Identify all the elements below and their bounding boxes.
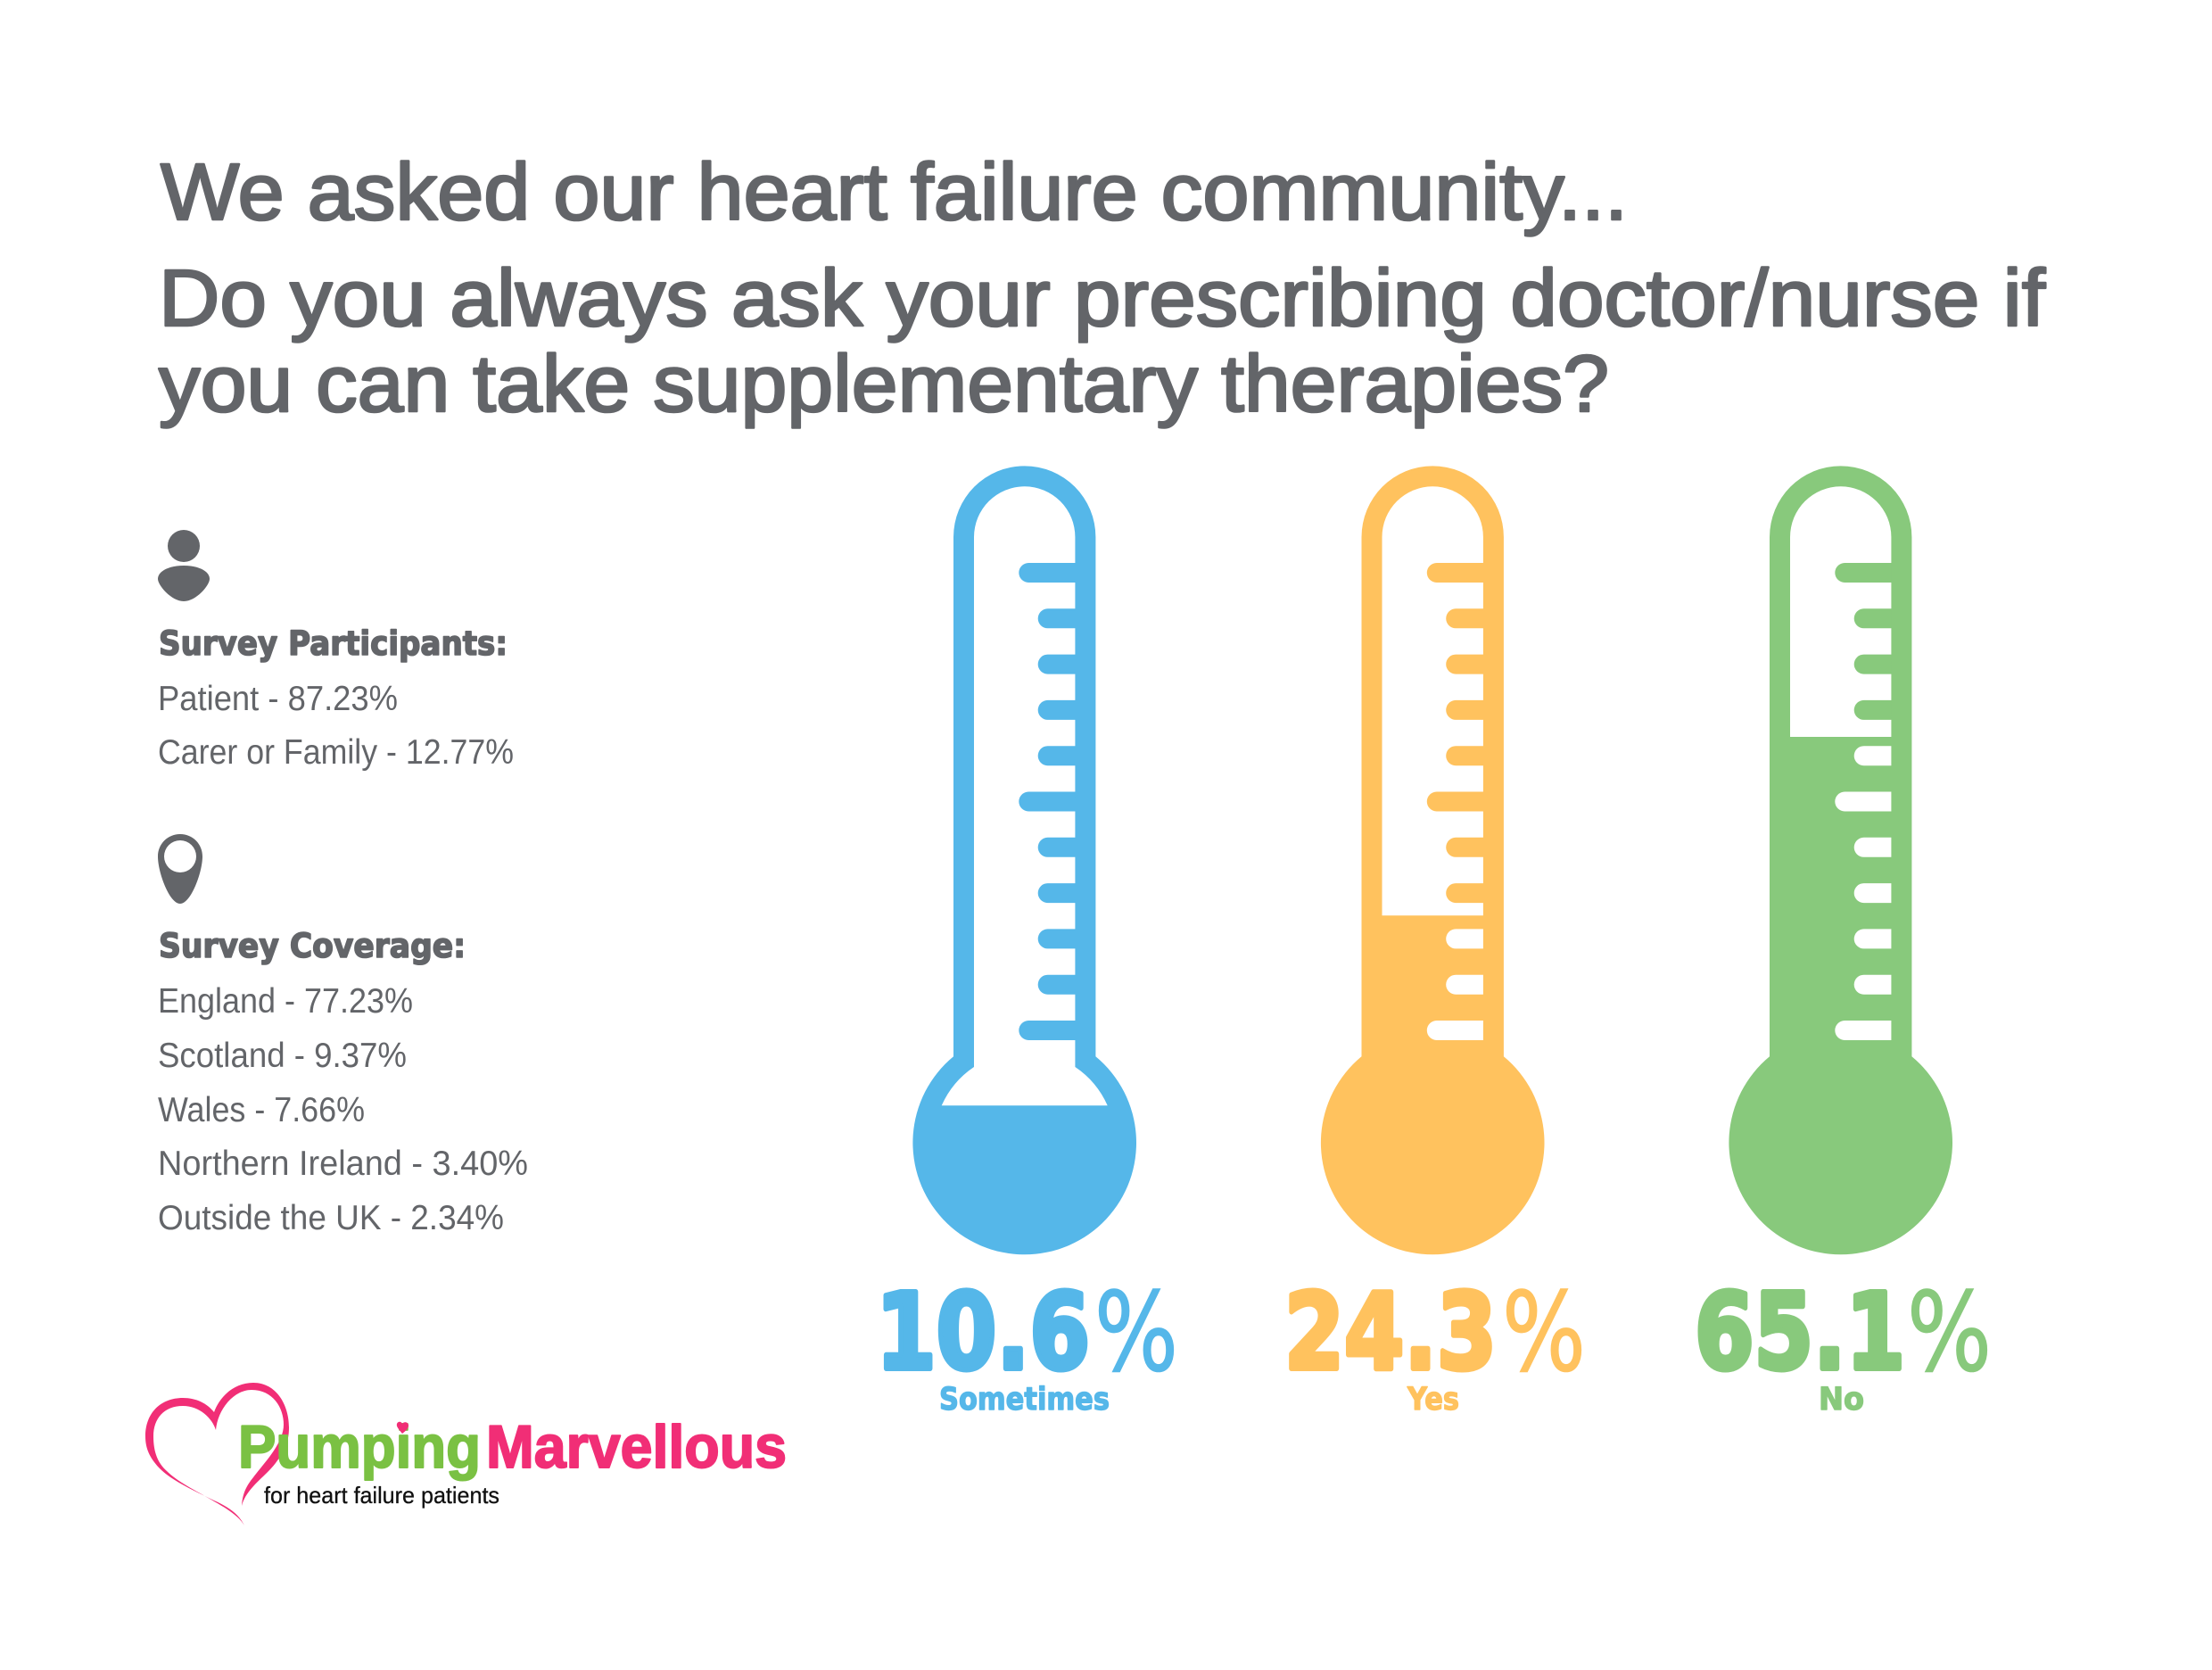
panel: survey participants (158, 530, 514, 772)
value: 65.1 (1695, 1270, 1905, 1393)
title line: intro: We asked our heart failure community... (161, 148, 1628, 237)
panel: survey coverage (158, 834, 528, 1237)
text: Scotland: Scotland - 9.37% (158, 1037, 407, 1075)
percent sign: % (1907, 1269, 1992, 1396)
scale ticks below level (1835, 746, 1891, 1040)
text: Northern Ireland: Northern Ireland - 3.40% (158, 1145, 528, 1183)
value: 10.6 (876, 1270, 1090, 1393)
title line: question part 1: Do you always ask your prescribing doctor/nurse if (159, 254, 2046, 343)
chart: thermometer Sometimes 10.6% (912, 466, 1136, 1254)
text: England: England - 77.23% (158, 982, 413, 1021)
text: Wales: Wales - 7.66% (158, 1091, 365, 1129)
value: 24.3 (1284, 1270, 1497, 1393)
scale ticks above level (1835, 563, 1892, 720)
icon: heart outline (145, 1383, 289, 1525)
scale ticks above level (1427, 563, 1483, 903)
label: Sometimes (939, 1382, 1110, 1418)
title line: question part 2: you can take supplementary therapies? (159, 340, 1609, 429)
empty cavity (1790, 486, 1891, 737)
stat: Sometimes 10.6% (876, 1269, 1178, 1418)
empty cavity (1382, 486, 1483, 915)
wordmark: Pumping: Pumping (238, 1413, 481, 1481)
icon: location pin (158, 834, 202, 904)
label: Yes (1407, 1382, 1459, 1418)
logo: Pumping Marvellous (145, 1383, 787, 1525)
wordmark: Marvellous: Marvellous (486, 1413, 787, 1481)
label: No (1819, 1382, 1864, 1418)
percent sign: % (1502, 1269, 1586, 1396)
percent sign: % (1094, 1269, 1178, 1396)
heading: survey coverage: Survey Coverage: (159, 927, 466, 965)
chart: thermometer Yes 24.3% (1321, 466, 1545, 1254)
thermometer outline and fill (1729, 466, 1952, 1254)
stat: No 65.1% (1695, 1269, 1992, 1418)
icon: small heart on i (397, 1422, 409, 1434)
scale ticks below level (1427, 929, 1483, 1040)
tagline: for heart failure patients (264, 1482, 499, 1509)
text: patient share: Patient - 87.23% (158, 680, 398, 718)
chart: thermometer No 65.1% (1729, 466, 1952, 1254)
text: Outside the UK: Outside the UK - 2.34% (158, 1199, 504, 1237)
empty cavity (942, 486, 1108, 1105)
title (159, 148, 2046, 429)
scale ticks (1019, 563, 1076, 1040)
text: carer share: Carer or Family - 12.77% (158, 733, 514, 772)
thermometer outline and fill (1321, 466, 1545, 1254)
icon: person (158, 530, 210, 601)
stat: Yes 24.3% (1284, 1269, 1586, 1418)
thermometer outline and fill (912, 466, 1136, 1254)
heading: survey participants: Survey Participants: (159, 624, 508, 663)
